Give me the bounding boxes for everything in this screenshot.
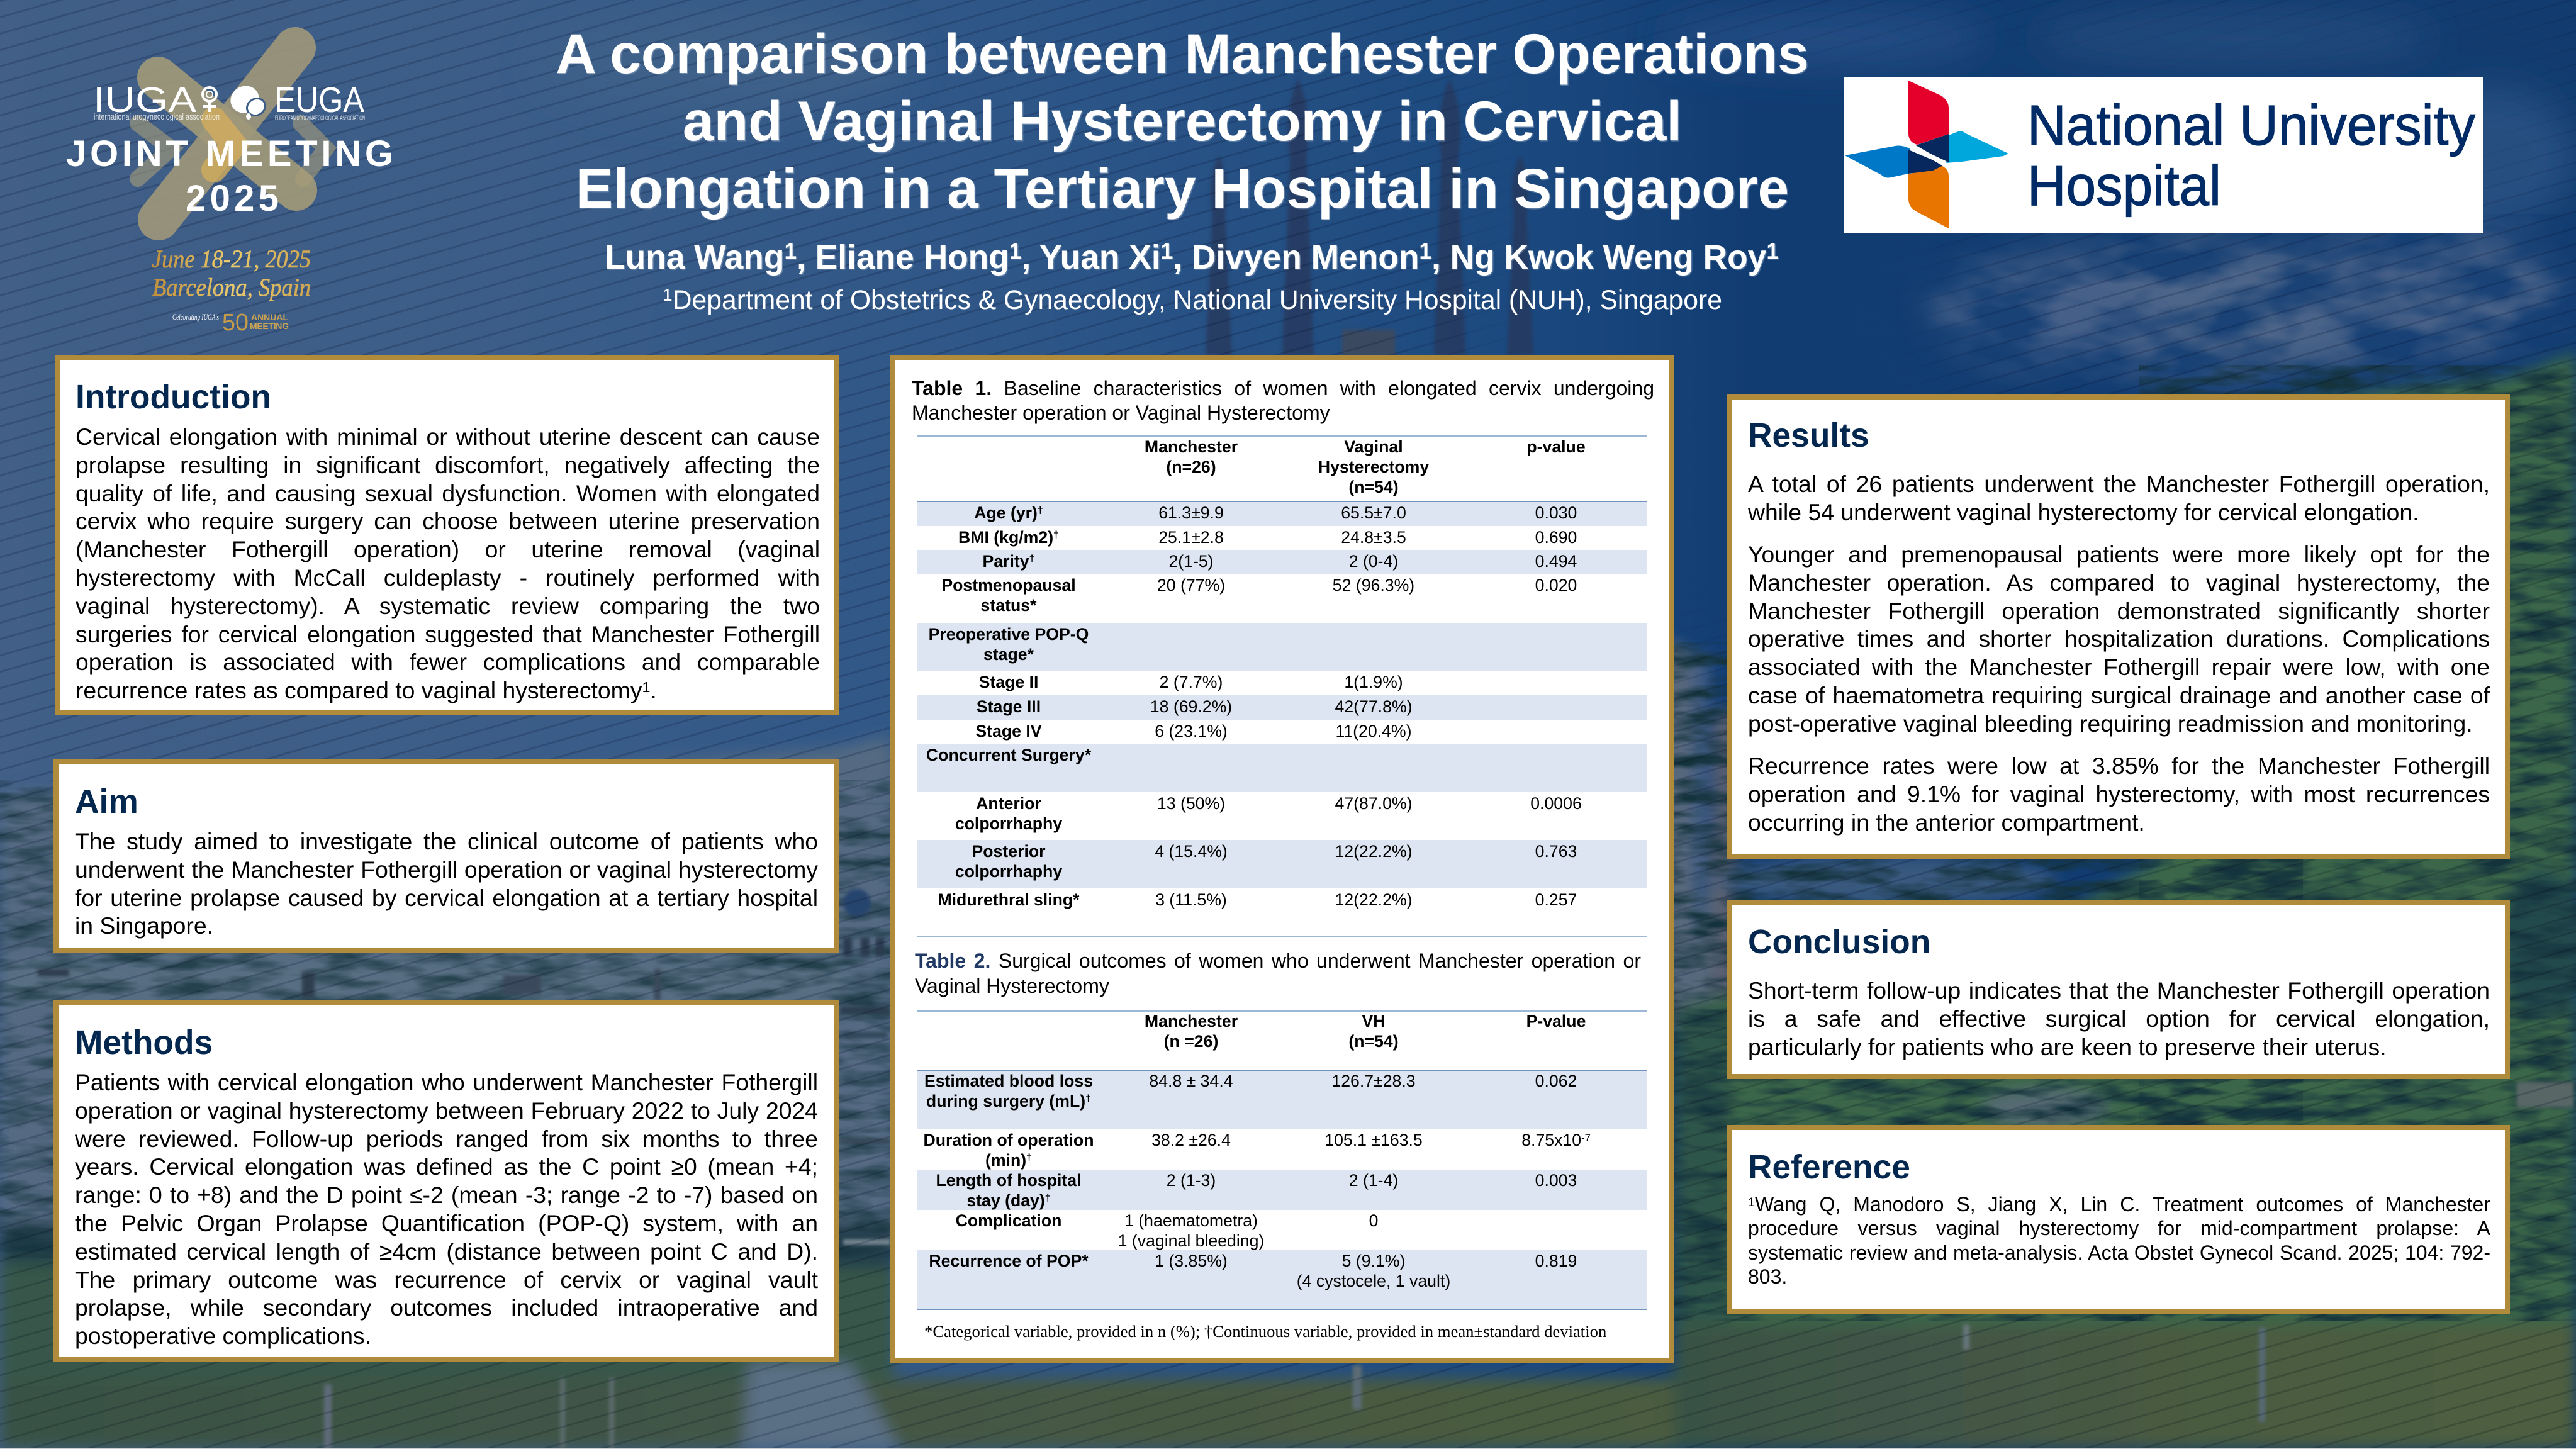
text: introduction body: recurrence rates as compared to vaginal hysterectomy1. — [76, 677, 657, 703]
text: results body: occurring in the anterior compartment. — [1748, 809, 2145, 836]
table 2: surgical outcomes: 2 (1-4) — [1349, 1171, 1398, 1190]
table 1: baseline characteristics: 0.494 — [1535, 552, 1577, 571]
text: reference citation: systematic review and meta-analysis. Acta Obstet Gynecol Scand. 2025; 104: 792- — [1748, 1241, 2490, 1264]
panel: tables — [890, 355, 1674, 1363]
table 1: baseline characteristics — [917, 435, 1647, 937]
table 1: baseline characteristics: Preoperative POP-Q — [929, 625, 1089, 644]
table 2 caption — [915, 948, 1641, 999]
logo wordmark: Hospital — [2027, 155, 2221, 218]
heading: methods: Methods — [75, 1024, 213, 1061]
heading: reference: Reference — [1748, 1149, 1910, 1186]
date and place: Barcelona, Spain — [152, 273, 311, 301]
table 1: baseline characteristics: 25.1±2.8 — [1158, 528, 1224, 547]
table 1: baseline characteristics: Stage IV — [975, 722, 1042, 741]
text: introduction body: operation is associated with fewer complications and comparable — [76, 649, 820, 675]
affiliation: 1Department of Obstetrics & Gynaecology, National University Hospital (NUH), Singapore — [663, 285, 1722, 315]
table 2: surgical outcomes: 0.062 — [1535, 1071, 1577, 1090]
conference logo: IUGA EUGA Joint Meeting 2025 — [66, 27, 393, 336]
title: A comparison between Manchester Operations — [556, 22, 1809, 85]
text: introduction body: quality of life, and causing sexual dysfunction. Women with elongated — [76, 480, 820, 506]
IUGA wordmark: IUGA — [93, 80, 196, 120]
table 1: baseline characteristics: (n=54) — [1348, 478, 1399, 496]
IUGA wordmark: international urogynecological association — [94, 111, 220, 121]
table 2: surgical outcomes: (n=54) — [1348, 1032, 1399, 1051]
table 1: baseline characteristics: Concurrent Surgery* — [926, 746, 1091, 764]
text: results body: associated with the Manchester Fothergill repair were low, with one — [1748, 654, 2490, 680]
text: introduction body: (Manchester Fothergill operation) or uterine removal (vaginal — [76, 536, 820, 562]
table 2: surgical outcomes: 105.1 ±163.5 — [1324, 1131, 1423, 1150]
50th annual meeting badge: MEETING — [250, 321, 289, 331]
table 2: surgical outcomes: (4 cystocele, 1 vault) — [1297, 1272, 1450, 1290]
spires — [1282, 78, 1314, 355]
meeting name — [66, 133, 393, 219]
table 2: surgical outcomes: 0.003 — [1535, 1171, 1577, 1190]
date and place — [152, 245, 311, 301]
text: aim body — [75, 827, 818, 940]
panel: aim — [53, 759, 839, 953]
table 2: surgical outcomes: Length of hospital — [936, 1171, 1081, 1190]
table 1: baseline characteristics: 3 (11.5%) — [1155, 890, 1227, 909]
text: introduction body: prolapse resulting in significant discomfort, negatively affecting the — [76, 452, 820, 478]
icon: venus symbol — [203, 87, 216, 112]
table 2: surgical outcomes: Duration of operation — [924, 1131, 1094, 1150]
table 1: baseline characteristics: Anterior — [976, 794, 1041, 813]
meeting name: JOINT MEETING — [66, 133, 393, 174]
table 2: surgical outcomes: Complication — [956, 1211, 1061, 1230]
table 2 caption: Vaginal Hysterectomy — [915, 975, 1109, 997]
text: methods body: were reviewed. Follow-up periods ranged from six months to three — [75, 1126, 818, 1152]
table 1: baseline characteristics: 18 (69.2%) — [1150, 697, 1232, 716]
text: introduction body — [76, 423, 820, 703]
panel: methods — [53, 1000, 839, 1362]
text: results body: operation and 9.1% for vaginal hysterectomy, with most recurrences — [1748, 781, 2490, 807]
table 2 caption: Table 2. Surgical outcomes of women who underwent Manchester operation or — [915, 949, 1641, 972]
table 1: baseline characteristics: Stage III — [977, 697, 1041, 716]
text: introduction body: hysterectomy with McCall culdeplasty - routinely performed with — [76, 564, 820, 591]
text: results body: Younger and premenopausal patients were more likely opt for the — [1748, 541, 2490, 568]
table 2: surgical outcomes: Recurrence of POP* — [929, 1251, 1089, 1270]
table 2: surgical outcomes: (n =26) — [1164, 1032, 1218, 1051]
cathedral masses — [0, 736, 890, 1233]
table 1: baseline characteristics: Vaginal — [1344, 437, 1403, 456]
building details — [843, 889, 871, 917]
text: introduction body: Cervical elongation with minimal or without uterine descent can cause — [76, 423, 820, 450]
text: methods body: the Pelvic Organ Prolapse Quantification (POP-Q) system, with an — [75, 1210, 818, 1236]
text: results body: Recurrence rates were low at 3.85% for the Manchester Fothergill — [1748, 752, 2490, 779]
50th annual meeting badge: Celebrating IUGA's — [172, 312, 219, 322]
text: aim body: for uterine prolapse caused by cervical elongation at a tertiary hospital — [75, 885, 818, 911]
table 2: surgical outcomes: 8.75x10-7 — [1521, 1131, 1591, 1150]
title: Elongation in a Tertiary Hospital in Singapore — [576, 157, 1789, 220]
text: aim body: The study aimed to investigate the clinical outcome of patients who — [75, 828, 818, 854]
table 2: surgical outcomes: P-value — [1526, 1012, 1586, 1031]
table 1: baseline characteristics: 65.5±7.0 — [1341, 503, 1406, 522]
table 1: baseline characteristics: 20 (77%) — [1157, 576, 1225, 595]
heading: results: Results — [1748, 417, 1869, 454]
heading: conclusion: Conclusion — [1748, 924, 1930, 961]
title: and Vaginal Hysterectomy in Cervical — [683, 89, 1682, 152]
table footnote: *Categorical variable, provided in n (%); †Continuous variable, provided in mean±standard deviation — [924, 1322, 1606, 1341]
table 1: baseline characteristics: status* — [981, 596, 1036, 615]
text: conclusion body — [1748, 976, 2490, 1061]
table 1: baseline characteristics: stage* — [983, 645, 1034, 664]
table 1: baseline characteristics: p-value — [1526, 437, 1586, 456]
text: methods body: range: 0 to +8) and the D point ≤-2 (mean -3; range -2 to -7) based on — [75, 1182, 818, 1208]
text: methods body: estimated cervical length of ≥4cm (distance between point C and D). — [75, 1238, 818, 1265]
text: reference citation — [1748, 1192, 2490, 1289]
table 2: surgical outcomes: 0 — [1369, 1211, 1378, 1230]
text: results body: case of haematometra requiring surgical drainage and another case of — [1748, 682, 2490, 708]
table 2: surgical outcomes: 1 (haematometra) — [1124, 1211, 1258, 1230]
table 2: surgical outcomes: stay (day)† — [966, 1191, 1051, 1210]
table 1: baseline characteristics: Stage II — [979, 673, 1038, 691]
text: methods body: postoperative complications. — [75, 1323, 371, 1349]
table 1: baseline characteristics: Parity† — [983, 552, 1034, 571]
text: results body: A total of 26 patients underwent the Manchester Fothergill operation, — [1748, 471, 2490, 497]
text: aim body: underwent the Manchester Fothergill operation or vaginal hysterectomy — [75, 856, 818, 883]
IUGA wordmark — [93, 80, 220, 121]
table 1: baseline characteristics: 12(22.2%) — [1335, 842, 1412, 861]
table 1: baseline characteristics: Postmenopausal — [941, 576, 1076, 595]
table 1: baseline characteristics: 13 (50%) — [1157, 794, 1225, 813]
panel: conclusion — [1727, 900, 2510, 1079]
EUGA wordmark: EUGA — [274, 80, 364, 120]
table 1: baseline characteristics: Age (yr)† — [974, 503, 1043, 522]
table 1 caption: Manchester operation or Vaginal Hysterectomy — [912, 401, 1330, 424]
table 1: baseline characteristics: 4 (15.4%) — [1155, 842, 1228, 861]
table 1: baseline characteristics: 0.0006 — [1530, 794, 1582, 813]
table 1: baseline characteristics: Manchester — [1145, 437, 1238, 456]
table 1: baseline characteristics: Hysterectomy — [1318, 457, 1429, 476]
text: introduction body: vaginal hysterectomy). A systematic review comparing the two — [76, 593, 820, 619]
date and place: June 18-21, 2025 — [152, 245, 311, 273]
text: conclusion body: Short-term follow-up indicates that the Manchester Fothergill operation — [1748, 977, 2490, 1004]
table 1: baseline characteristics: 12(22.2%) — [1335, 890, 1412, 909]
table 2: surgical outcomes: 126.7±28.3 — [1331, 1071, 1416, 1090]
text: reference citation: procedure versus vaginal hysterectomy for mid-compartment prolapse: A — [1748, 1217, 2490, 1239]
table 1: baseline characteristics: 2 (7.7%) — [1160, 673, 1223, 691]
table 1: baseline characteristics: Posterior — [972, 842, 1046, 861]
meeting name: 2025 — [186, 178, 279, 219]
table 2: surgical outcomes: 5 (9.1%) — [1342, 1251, 1405, 1270]
panel: results — [1727, 394, 2510, 859]
table 1: baseline characteristics: 0.020 — [1535, 576, 1577, 595]
table 2: surgical outcomes: 0.819 — [1535, 1251, 1577, 1270]
table 2: surgical outcomes: Estimated blood loss — [924, 1071, 1093, 1090]
table 1: baseline characteristics: 52 (96.3%) — [1333, 576, 1414, 595]
panel: introduction — [55, 355, 839, 715]
heading: aim: Aim — [75, 783, 138, 820]
text: methods body: The primary outcome was recurrence of cervix or vaginal vault — [75, 1267, 818, 1293]
icon: EUGA emblem — [226, 81, 268, 120]
text: reference citation: 1Wang Q, Manodoro S, Jiang X, Lin C. Treatment outcomes of Manchester — [1748, 1193, 2490, 1216]
table 1: baseline characteristics: 2 (0-4) — [1349, 552, 1398, 571]
table 2: surgical outcomes: 38.2 ±26.4 — [1151, 1131, 1231, 1150]
table 1: baseline characteristics: Midurethral sling* — [938, 890, 1080, 909]
table 1: baseline characteristics: 0.030 — [1535, 503, 1577, 522]
text: results body: Manchester operation. As compared to vaginal hysterectomy, the — [1748, 569, 2490, 596]
text: results body: operative times and shorter hospitalization durations. Complications — [1748, 625, 2490, 652]
table 2: surgical outcomes: 2 (1-3) — [1167, 1171, 1216, 1190]
text: methods body: Patients with cervical elongation who underwent Manchester Fothergill — [75, 1069, 818, 1095]
trees — [1674, 352, 2576, 1328]
table 2: surgical outcomes — [917, 1010, 1647, 1310]
table 2: surgical outcomes: during surgery (mL)† — [926, 1092, 1091, 1111]
table 1: baseline characteristics: 47(87.0%) — [1335, 794, 1412, 813]
table 1: baseline characteristics: 0.690 — [1535, 528, 1577, 547]
table 1: baseline characteristics: (n=26) — [1166, 457, 1216, 476]
text: results body: while 54 underwent vaginal hysterectomy for cervical elongation. — [1748, 499, 2419, 525]
text: results body: post-operative vaginal bleeding requiring readmission and monitoring. — [1748, 710, 2473, 737]
table 1: baseline characteristics: colporrhaphy — [955, 814, 1062, 833]
table 1: baseline characteristics: 6 (23.1%) — [1155, 722, 1228, 741]
text: introduction body: surgeries for cervical elongation suggested that Manchester Fothergill — [76, 621, 820, 647]
table 2: surgical outcomes: (min)† — [985, 1151, 1032, 1170]
table 1: baseline characteristics: 61.3±9.9 — [1158, 503, 1224, 522]
table 2: surgical outcomes: Manchester — [1145, 1012, 1238, 1031]
authors: Luna Wang1, Eliane Hong1, Yuan Xi1, Divyen Menon1, Ng Kwok Weng Roy1 — [605, 239, 1779, 276]
table 1: baseline characteristics: 2(1-5) — [1168, 552, 1214, 571]
table 1: baseline characteristics: colporrhaphy — [955, 862, 1062, 881]
text: results body: Manchester Fothergill operation demonstrated significantly shorter — [1748, 598, 2490, 624]
text: results body — [1748, 470, 2490, 836]
50th annual meeting badge: ANNUAL — [251, 312, 288, 322]
heading: introduction: Introduction — [76, 379, 271, 416]
text: aim body: in Singapore. — [75, 912, 213, 939]
table 1: baseline characteristics: 0.763 — [1535, 842, 1577, 861]
50th annual meeting badge: 50 — [222, 310, 249, 336]
50th annual meeting badge — [172, 310, 289, 336]
text: methods body: prolapse, while secondary outcomes included intraoperative and — [75, 1294, 818, 1321]
table 1: baseline characteristics: 42(77.8%) — [1335, 697, 1412, 716]
text: methods body — [75, 1068, 818, 1350]
table 1 caption: Table 1. Baseline characteristics of women with elongated cervix undergoing — [912, 377, 1654, 400]
table 1: baseline characteristics: 1(1.9%) — [1344, 673, 1403, 691]
table 1 caption — [912, 376, 1654, 425]
text: conclusion body: is a safe and effective surgical option for cervical elongation, — [1748, 1005, 2490, 1032]
icon: gold X mark — [138, 48, 326, 220]
text: methods body: operation or vaginal hysterectomy between February 2022 to July 2024 — [75, 1097, 818, 1124]
text: methods body: years. Cervical elongation was defined as the C point ≥0 (mean +4; — [75, 1153, 818, 1180]
logo wordmark — [2027, 94, 2475, 218]
text: introduction body: cervix who require surgery can choose between uterine preservation — [76, 508, 820, 534]
panel: reference — [1727, 1125, 2510, 1314]
table 2: surgical outcomes: 84.8 ± 34.4 — [1149, 1071, 1233, 1090]
dark band — [0, 1224, 893, 1268]
table 1: baseline characteristics: 0.257 — [1535, 890, 1577, 909]
table 2: surgical outcomes: 1 (vaginal bleeding) — [1118, 1231, 1264, 1250]
table 1: baseline characteristics: 11(20.4%) — [1335, 722, 1412, 741]
table 1: baseline characteristics: BMI (kg/m2)† — [958, 528, 1059, 547]
hospital logo: National University Hospital — [1844, 77, 2483, 233]
text: reference citation: 803. — [1748, 1265, 1787, 1288]
table 2: surgical outcomes: VH — [1362, 1012, 1386, 1031]
text: conclusion body: particularly for patients who are keen to preserve their uterus. — [1748, 1034, 2387, 1060]
title — [556, 22, 1809, 221]
table 1: baseline characteristics: 24.8±3.5 — [1341, 528, 1406, 547]
lawn — [0, 1378, 2576, 1449]
table 2: surgical outcomes: 1 (3.85%) — [1155, 1251, 1228, 1270]
